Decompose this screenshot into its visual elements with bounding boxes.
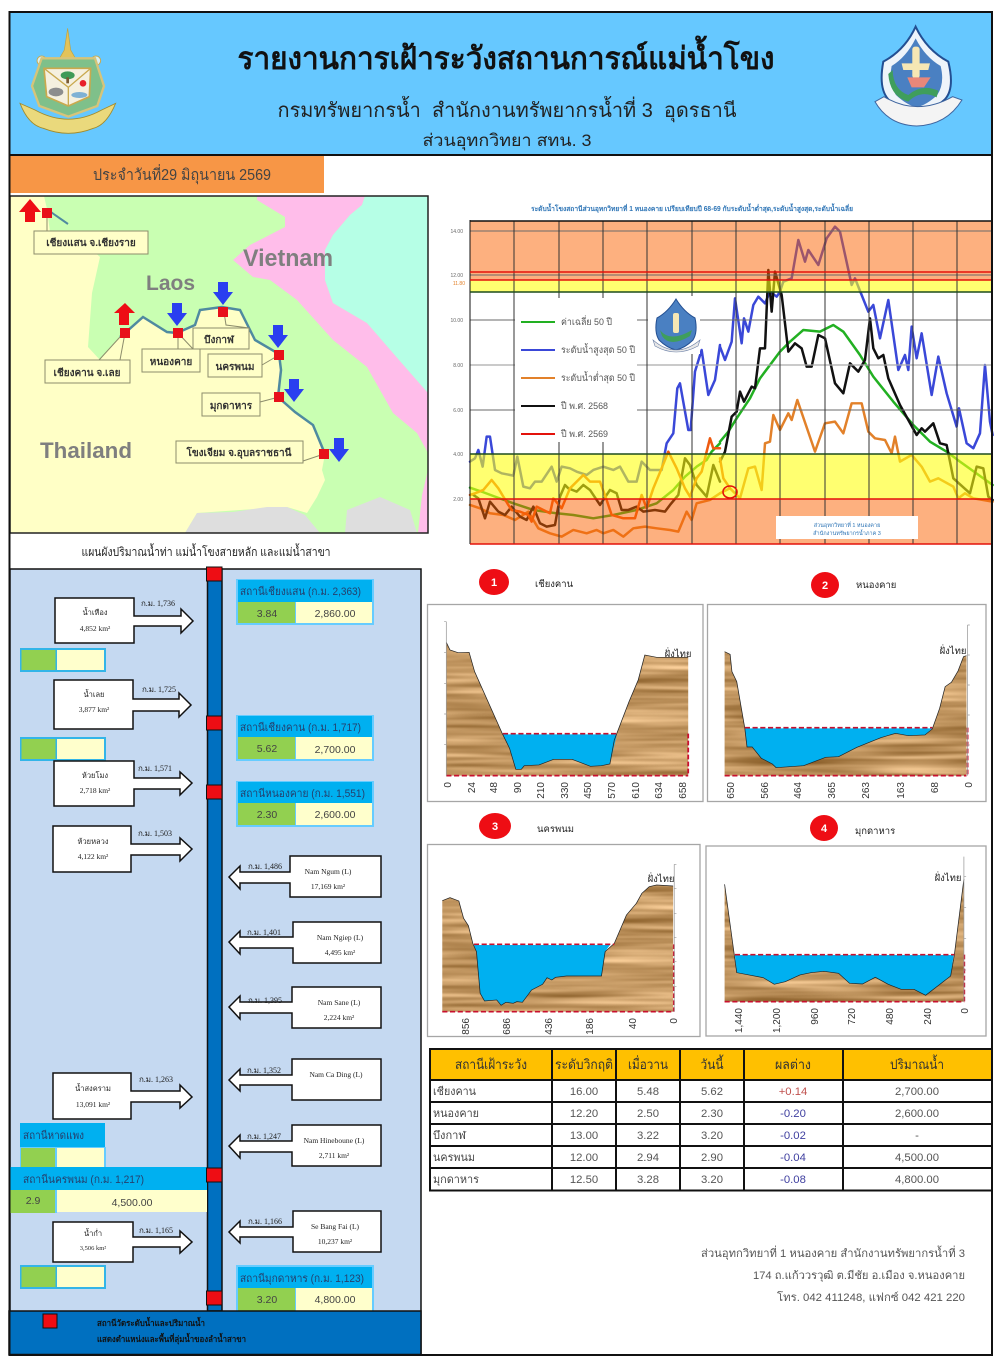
row: Chiang Khan: 5.62 [701,1086,723,1098]
row: Bueng Kan: -0.02 [780,1130,806,1142]
cross-section 1 chart: 24 [467,782,478,793]
station label: Nong Khai [142,349,200,372]
cross-section 4 chart: 1,440 [734,1008,745,1033]
footer: office address [701,1245,965,1304]
tributary: Nam Sane: Nam Sane (L) [318,998,361,1007]
station label: Chiang Khan: เชียงคาน จ.เลย [54,367,121,379]
row: Nong Khai: 2,600.00 [895,1108,939,1120]
station label: Mukdahan: มุกดาหาร [210,401,253,412]
caption: diagram heading: แผนผังปริมาณน้ำท่า แม่น้ำโขงสายหลัก และแม่น้ำสาขา [82,543,330,559]
tributary: Nam Ca Ding: Nam Ca Ding (L) [309,1070,363,1079]
y axis labels [450,229,465,503]
section name: ส่วนอุทกวิทยา สทน. 3 [422,131,592,151]
legend: 2568: ปี พ.ศ. 2568 [560,400,608,412]
tributary: Nam Huang [55,598,193,643]
cross-section 1 heading: Chiang Khan: เชียงคาน [535,578,574,590]
empty station row 1 [20,648,106,672]
table header: ผลต่าง [775,1057,811,1072]
tributary: Nam Ngum: 17,169 km² [311,882,346,891]
row: Nakhon Phanom: -0.04 [780,1152,806,1164]
station card: Nakhon Phanom [10,1167,207,1213]
date bar: ประจำวันที่29 มิถุนายน 2569 [93,164,271,185]
row: Bueng Kan: - [915,1130,919,1142]
station label: Nakhon Phanom [208,354,262,377]
cross-section 4 chart: ฝั่งไทย [935,871,961,884]
legend: 2568 [521,400,608,412]
legend bar: แสดงตำแหน่งและพื้นที่ลุ่มน้ำของลำน้ำสาขา [97,1332,246,1345]
main river [208,569,222,1311]
cross-section 1 chart: 0 [443,782,454,788]
icon: left crest [20,28,116,133]
row: Bueng Kan: 3.20 [701,1130,723,1142]
icon: right department seal [875,27,962,126]
table header: ระดับวิกฤติ [555,1057,613,1072]
cross-section 4 chart: 0 [960,1008,971,1014]
tributary: Nam Ca Ding: ก.ม. 1,352 [247,1066,281,1075]
tributary: Nam Huang: น้ำเหือง [82,607,108,617]
tributary: Nam Hinboune: Nam Hineboune (L) [304,1136,365,1145]
tributary: Huai Mong: ก.ม. 1,571 [138,764,172,773]
station card: Chiang Khan [236,715,374,761]
header banner [10,12,992,155]
title: รายงานการเฝ้าระวังสถานการณ์แม่น้ำโขง [238,35,774,76]
tributary: Nam Songkhram: น้ำสงคราม [75,1083,111,1093]
station label: Chiang Saen [34,231,148,254]
row: Bueng Kan: บึงกาฬ [433,1130,466,1142]
chart title: ระดับน้ำโขงสถานีส่วนอุทกวิทยาที่ 1 หนองคาย เปรียบเทียบปี 68-69 กับระดับน้ำต่ำสุด,ระดับน้ำสูงสุด,ระดับน้ำเฉลี่ย [531,202,853,214]
y axis labels: 14.00 [450,229,463,235]
river: Mekong [47,209,68,224]
tributary: Nam Ngiep: Nam Ngiep (L) [317,933,364,942]
tributary: Nam Huang: 4,852 km² [80,624,111,633]
station card: Hat Phaeng [20,1123,106,1168]
tributary: Se Bang Fai: 10,237 km² [318,1237,353,1246]
tributary: Nam Loei: ก.ม. 1,725 [142,685,176,694]
cross-section 2 chart: 365 [827,782,838,799]
row: Mukdahan: มุกดาหาร [433,1174,479,1186]
cross-section 3 chart [428,844,700,1036]
legend: 2569 [521,428,608,440]
row: Chiang Khan: 5.48 [637,1086,659,1098]
station label: Chiang Khan [45,360,130,383]
cross-section 1 chart: 330 [560,782,571,799]
footer: office address: โทร. 042 411248, แฟกซ์ 042 421 220 [777,1290,965,1304]
table header: ปริมาณน้ำ [890,1054,944,1072]
tributary: Huai Mong: 2,718 km² [80,786,111,795]
tributary: Nam Ngiep: ก.ม. 1,401 [247,928,281,937]
chart grid [470,220,992,544]
table header: วันนี้ [700,1054,724,1072]
map labels: countries: Laos [146,272,195,295]
station card: Chiang Khan: สถานีเชียงคาน (ก.ม. 1,717) [240,721,361,734]
cross-section 3 chart: 436 [544,1018,555,1035]
station card: Chiang Khan: 2,700.00 [315,744,356,756]
legend: 50-yr mean [521,315,612,328]
cross-section 2 chart: 0 [964,782,975,788]
row: Mukdahan [433,1174,939,1186]
cross-section 1 chart: ฝั่งไทย [665,647,691,660]
marker: current level circle [723,486,737,498]
legend: 2569: ปี พ.ศ. 2569 [560,428,608,440]
station card: Nong Khai: สถานีหนองคาย (ก.ม. 1,551) [240,787,365,800]
leader lines [47,213,324,461]
tributary: Nam Huang: ก.ม. 1,736 [141,599,175,608]
row: Mukdahan: 4,800.00 [895,1174,939,1186]
y axis labels: 4.00 [453,452,463,458]
row: Nakhon Phanom [433,1152,939,1164]
cross-section 1 heading: Chiang Khan: 1 [491,577,497,589]
row: Nakhon Phanom: 2.94 [637,1152,659,1164]
chart footer note: สำนักงานทรัพยากรน้ำภาค 3 [813,529,881,537]
row: Nakhon Phanom: 12.00 [570,1152,598,1164]
row: Chiang Khan [433,1085,939,1098]
tributary: Nam Ngum [229,856,381,897]
empty station row 2 [20,737,106,761]
tributary: Nam Ngum: ก.ม. 1,486 [248,862,282,871]
legend: 50-yr mean: ค่าเฉลี่ย 50 ปี [561,315,612,328]
cross-section 2 chart: ฝั่งไทย [940,644,966,657]
date bar [10,156,324,193]
station label: Khong Chiam [176,441,303,463]
cross-section 4 chart [706,846,986,1036]
row: Mukdahan: 12.50 [570,1174,598,1186]
cross-section 2 heading: Nong Khai [811,572,896,598]
station label: Bueng Kan: บึงกาฬ [204,334,235,346]
chart footer note: ส่วนอุทกวิทยาที่ 1 หนองคาย [814,521,880,529]
station card: Nong Khai: 2,600.00 [315,809,356,821]
cross-section 1 chart: 570 [607,782,618,799]
cross-section 4 chart: 480 [885,1008,896,1025]
curves left half [470,345,720,537]
cross-section 3 chart: 186 [585,1018,596,1035]
footer: office address: ส่วนอุทกวิทยาที่ 1 หนองคาย สำนักงานทรัพยากรน้ำที่ 3 [701,1245,965,1260]
chart footer note [776,516,918,539]
tributary: Nam Hinboune: 2,711 km² [319,1151,350,1160]
panel: Mekong station map [10,196,428,533]
station card: Mukdahan: 3.20 [257,1294,277,1306]
map labels: countries: Vietnam [243,245,333,272]
y axis labels: 6.00 [453,408,463,414]
cross-section 4 chart: 720 [847,1008,858,1025]
row: Bueng Kan: 13.00 [570,1130,598,1142]
cross-section 4 chart: 1,200 [772,1008,783,1033]
station card: Nong Khai [236,781,374,827]
tributary: Nam Loei [54,680,191,729]
row: Nong Khai: 2.50 [637,1108,659,1120]
cross-section 3 heading: Nakhon Phanom [479,813,574,839]
y axis labels: 12.00 [450,273,463,279]
tributary: Nam Loei: น้ำเลย [84,689,104,699]
cross-section 1 chart [428,604,703,802]
cross-section 1 chart: 48 [489,782,500,793]
station card: Mukdahan: 4,800.00 [315,1294,356,1306]
cross-section 1 chart: 634 [654,782,665,799]
y axis labels: 2.00 [453,497,463,503]
cross-section 2 chart: 566 [760,782,771,799]
station card: Chiang Saen: 2,860.00 [315,608,356,620]
icon: blue down arrows [167,282,349,462]
tributary: Nam Songkhram [53,1073,192,1119]
cross-section 1 chart: 90 [513,782,524,793]
cross-section 1 heading: Chiang Khan [479,569,574,595]
row: Bueng Kan: 3.22 [637,1130,659,1142]
row: Nong Khai [433,1108,939,1120]
legend: 50-yr min: ระดับน้ำต่ำสุด 50 ปี [561,371,635,384]
row: Mukdahan: 3.28 [637,1174,659,1186]
station label: Bueng Kan [193,328,249,349]
row: Chiang Khan: 16.00 [570,1086,598,1098]
tributary: Nam Songkhram: 13,091 km² [76,1100,111,1109]
tributary: Nam Kam: 3,506 km² [80,1245,106,1252]
row: Chiang Khan: เชียงคาน [433,1085,476,1098]
tributary: Nam Kam: น้ำก่ำ [84,1228,102,1238]
table: monitoring stations [429,1048,992,1191]
tributary: Nam Ngiep: 4,495 km² [325,948,356,957]
tributary: Huai Luang [53,826,192,872]
tributary: Se Bang Fai: Se Bang Fai (L) [311,1222,360,1231]
cross-section 4 heading: Mukdahan [810,815,895,841]
cross-section 4 chart: 240 [923,1008,934,1025]
row: Mukdahan: 3.20 [701,1174,723,1186]
row: Mukdahan: -0.08 [780,1174,806,1186]
station label: Khong Chiam: โขงเจียม จ.อุบลราชธานี [185,446,292,459]
y axis labels: 11.80 [453,281,465,287]
tributary: Nam Ngiep [229,922,381,963]
tributary: Nam Ca Ding [229,1059,381,1100]
tributary: Nam Hinboune: ก.ม. 1,247 [247,1132,281,1141]
tributary: Se Bang Fai [229,1211,381,1252]
tributary: Nam Kam: ก.ม. 1,165 [139,1226,173,1235]
cross-section 2 chart [708,604,986,802]
tributary: Nam Songkhram: ก.ม. 1,263 [139,1075,173,1084]
icon: red up arrows [19,199,135,325]
station card: Nakhon Phanom: สถานีนครพนม (ก.ม. 1,217) [23,1173,144,1186]
legend: 50-yr max: ระดับน้ำสูงสุด 50 ปี [561,343,635,356]
station card: Nakhon Phanom: 4,500.00 [112,1197,153,1209]
station card: Hat Phaeng: สถานีหาดแพง [23,1129,84,1142]
cross-section 4 heading: Mukdahan: มุกดาหาร [855,826,895,837]
curves right half [720,227,993,502]
cross-section 1 chart: 658 [678,782,689,799]
station card: Chiang Saen: 3.84 [257,608,277,620]
map labels: countries: Thailand [40,438,132,463]
table header: สถานีเฝ้าระวัง [455,1057,527,1072]
station label: Nong Khai: หนองคาย [150,357,192,368]
cross-section 3 chart: 40 [628,1018,639,1029]
row: Nong Khai: -0.20 [780,1108,806,1120]
row: Nong Khai: 12.20 [570,1108,598,1120]
station markers [42,208,329,459]
cross-section 4 heading: Mukdahan: 4 [821,823,828,835]
legend bar: สถานีวัดระดับน้ำและปริมาณน้ำ [97,1316,205,1328]
footer: office address: 174 ถ.แก้ววรวุฒิ ต.มีชัย อ.เมือง จ.หนองคาย [753,1269,965,1282]
table header: เมื่อวาน [628,1055,668,1072]
map labels: countries [40,245,333,463]
panel: schematic of main river and tributaries [9,567,421,1355]
cross-section 2 heading: Nong Khai: หนองคาย [856,580,896,591]
station label: Chiang Saen: เชียงแสน จ.เชียงราย [46,237,136,249]
tributary: Nam Sane: 2,224 km² [324,1013,355,1022]
cross-section 3 chart: 856 [461,1018,472,1035]
tributary: Nam Sane [229,987,381,1028]
tributary: Nam Kam [53,1222,192,1262]
cross-section 2 heading: Nong Khai: 2 [822,580,828,592]
tributary: Huai Mong: ห้วยโมง [82,771,108,780]
tributary: Huai Luang: ห้วยหลวง [78,837,109,846]
cross-section 3 chart: 686 [502,1018,513,1035]
cross-section 3 heading: Nakhon Phanom: 3 [492,821,498,833]
cross-section 1 chart: 610 [631,782,642,799]
legend bar [9,1311,421,1354]
tributary: Huai Luang: ก.ม. 1,503 [138,829,172,838]
cross-section 1 chart: 450 [583,782,594,799]
chart: water level at Nong Khai [450,202,993,544]
tributary: Se Bang Fai: ก.ม. 1,166 [248,1217,282,1226]
station card: Chiang Saen [236,579,374,625]
station card: Mukdahan [236,1265,374,1311]
station label: Mukdahan [202,393,260,416]
station card: Nong Khai: 2.30 [257,809,277,821]
tributary: Nam Sane: ก.ม. 1,395 [248,996,282,1005]
table header [455,1054,944,1072]
station card: Chiang Saen: สถานีเชียงแสน (ก.ม. 2,363) [240,585,361,598]
station label: Nakhon Phanom: นครพนม [216,362,254,373]
station card: Chiang Khan: 5.62 [257,743,277,755]
y axis labels: 8.00 [453,363,463,369]
cross-section 2 chart: 650 [726,782,737,799]
cross-section 4 chart: 960 [810,1008,821,1025]
row: Nakhon Phanom: 4,500.00 [895,1152,939,1164]
row: Nong Khai: หนองคาย [433,1108,479,1120]
cross-section 3 chart: 0 [669,1018,680,1024]
legend [515,298,637,442]
icon: chart seal [648,296,700,354]
station markers on main river [206,567,222,1305]
cross-section 3 heading: Nakhon Phanom: นครพนม [537,824,574,835]
tributary: Nam Ngum: Nam Ngum (L) [305,867,352,876]
tributary: Nam Hinboune [229,1125,381,1166]
tributary: Huai Mong [54,761,192,806]
station card: Nakhon Phanom: 2.9 [26,1195,40,1207]
cross-section 2 chart: 163 [896,782,907,799]
cross-section 1 chart: 210 [536,782,547,799]
subtitle: กรมทรัพยากรน้ำ สำนักงานทรัพยากรน้ำที่ 3 อุดรธานี [278,96,737,123]
station card: Mukdahan: สถานีมุกดาหาร (ก.ม. 1,123) [240,1272,364,1285]
cross-section 2 chart: 68 [930,782,941,793]
cross-section 2 chart: 263 [861,782,872,799]
row: Nakhon Phanom: 2.90 [701,1152,723,1164]
cross-section 2 chart: 464 [793,782,804,799]
row: Nakhon Phanom: นครพนม [433,1152,475,1164]
legend: 50-yr min [521,371,635,384]
y axis labels: 10.00 [450,318,463,324]
row: Chiang Khan: +0.14 [779,1086,807,1098]
row: Bueng Kan [433,1130,919,1142]
legend: 50-yr max [521,343,635,356]
tributary: Huai Luang: 4,122 km² [78,852,109,861]
tributary: Nam Loei: 3,877 km² [79,705,110,714]
chart bands [470,221,992,544]
cross-section 3 chart: ฝั่งไทย [648,872,674,885]
row: Chiang Khan: 2,700.00 [895,1086,939,1098]
row: Nong Khai: 2.30 [701,1108,723,1120]
empty station row 3 [20,1265,106,1289]
